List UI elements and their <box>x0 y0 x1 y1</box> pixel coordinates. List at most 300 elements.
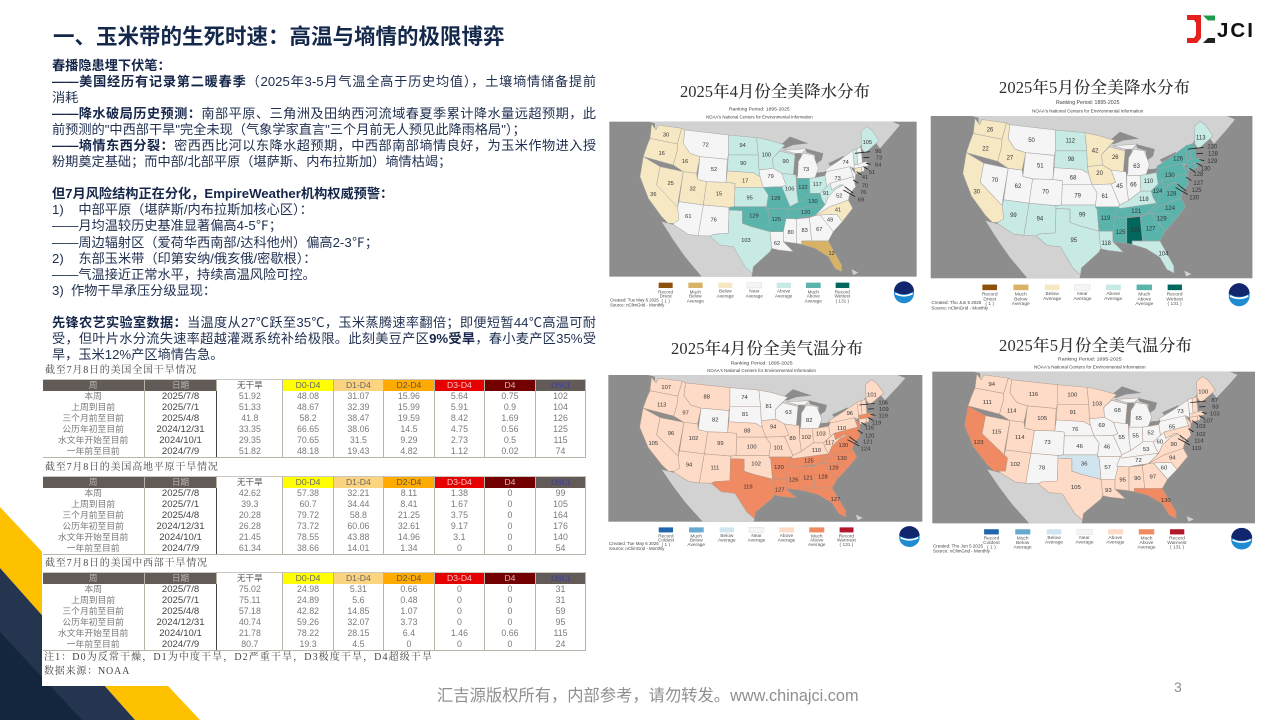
choropleth: May precipitation: 130 <box>1165 173 1175 179</box>
choropleth: May temperature: 53 <box>1143 447 1149 453</box>
table: national drought: 2024/7/9 <box>162 446 199 457</box>
choropleth: April precipitation: 17 <box>742 178 748 184</box>
table: national drought: 三个月前至目前 <box>62 413 124 423</box>
table: national drought: 48.18 <box>297 446 319 456</box>
choropleth: May temperature: Above <box>1140 540 1154 546</box>
table: midwest drought: 0.48 <box>400 595 417 605</box>
table: midwest drought: D0-D4 <box>296 573 320 583</box>
table: high plains drought: 2025/7/8 <box>162 488 199 499</box>
choropleth: May temperature: Average <box>1075 540 1094 545</box>
table: national drought: D4 <box>504 380 515 390</box>
choropleth: May temperature: 94 <box>988 382 996 388</box>
choropleth: April precipitation: 90 <box>783 159 789 165</box>
choropleth: April precipitation: 41 <box>835 207 841 213</box>
choropleth: April precipitation: Above <box>807 294 820 299</box>
choropleth: May precipitation: 45 <box>1116 184 1123 190</box>
table: national drought: 31.07 <box>347 391 369 401</box>
table: high plains drought: 3.75 <box>451 510 468 520</box>
table: high plains drought: 0 <box>508 543 512 553</box>
choropleth: May temperature: Average <box>1137 545 1156 550</box>
choropleth: April precipitation <box>609 106 917 308</box>
choropleth: May precipitation: 68 <box>1070 176 1077 182</box>
table: national drought: 4.82 <box>400 446 417 456</box>
text block: analysis: ——美国经历有记录第二暖春季（2025年3-5月气温全高于历史均值），土壤墒情储备提前 <box>52 74 596 89</box>
choropleth: April temperature: 125 <box>804 459 814 464</box>
text block: analysis <box>52 58 596 362</box>
choropleth: May temperature: 103 <box>1092 402 1102 408</box>
choropleth: May precipitation: Much <box>1015 292 1027 298</box>
choropleth: April temperature: 126 <box>789 478 798 483</box>
choropleth: April temperature: 102 <box>689 436 698 442</box>
choropleth: April temperature: 101 <box>867 392 877 398</box>
text block: analysis: 旱，玉米12%产区墒情告急。 <box>52 347 223 362</box>
table: national drought: 水文年开始至目前 <box>58 435 128 445</box>
choropleth: April precipitation: 41 <box>862 175 868 181</box>
text block: analysis: 粉期奠定基础；而中部/北部平原（堪萨斯、内布拉斯加）墒情枯竭； <box>52 154 451 169</box>
choropleth: May precipitation: 50 <box>1028 138 1036 144</box>
choropleth: April precipitation: Record <box>835 289 850 294</box>
choropleth: April precipitation: 52 <box>711 167 717 173</box>
table: midwest drought: 0 <box>457 595 462 605</box>
choropleth: May temperature: 94 <box>1169 456 1177 461</box>
table: midwest drought: 24.89 <box>297 595 319 605</box>
text block: analysis: ——周边辐射区（爱荷华西南部/达科他州）偏高2-3℉； <box>52 235 378 250</box>
choropleth: May precipitation: 26 <box>987 128 994 134</box>
choropleth: May temperature: Record <box>1169 536 1185 542</box>
table: national drought: 2025/7/8 <box>162 391 199 402</box>
choropleth: April precipitation: 122 <box>798 185 808 191</box>
table: national drought: 一年前至目前 <box>67 446 120 456</box>
table: midwest drought: 32.07 <box>347 617 369 627</box>
choropleth: April precipitation: 100 <box>762 152 771 158</box>
choropleth: April precipitation: 125 <box>772 217 781 223</box>
table: high plains drought: DSCI <box>551 477 570 487</box>
choropleth: April precipitation: 72 <box>703 142 709 148</box>
choropleth: April precipitation: Near <box>749 289 760 294</box>
table: high plains drought: 176 <box>553 521 568 531</box>
table: high plains drought: 0 <box>508 499 512 509</box>
table: midwest drought <box>43 572 586 651</box>
choropleth: May temperature: 52 <box>1147 431 1154 436</box>
choropleth: May precipitation: 63 <box>1133 164 1141 170</box>
choropleth: May temperature: Record <box>984 536 1000 542</box>
choropleth: May precipitation: 42 <box>1092 148 1098 154</box>
table: national drought: D0-D4 <box>296 380 320 390</box>
choropleth: April precipitation: 106 <box>785 186 794 192</box>
choropleth: April precipitation: Average <box>746 293 763 298</box>
text block: analysis: 春播隐患埋下伏笔： <box>52 58 171 73</box>
choropleth: April temperature: 100 <box>747 445 757 451</box>
table: national drought: 38.47 <box>347 413 369 423</box>
choropleth: April temperature: ( 1 ) <box>662 542 671 547</box>
table: high plains drought: 无干旱 <box>237 477 263 487</box>
choropleth: April temperature: 127 <box>831 497 840 503</box>
table: high plains drought: 42.62 <box>239 488 261 498</box>
choropleth: May temperature: 87 <box>1211 398 1218 404</box>
choropleth: April precipitation: Created: Tue May 6 2025 <box>610 297 659 302</box>
table: national drought: 125 <box>553 424 568 434</box>
choropleth: May precipitation: 126 <box>1173 156 1184 162</box>
choropleth: May precipitation: Average <box>1012 301 1030 307</box>
table: high plains drought: 58.8 <box>350 510 367 520</box>
table: midwest drought: 0 <box>508 606 512 616</box>
choropleth: April precipitation: 49 <box>827 217 833 223</box>
text block: analysis: ——气温接近正常水平，持续高温风险可控。 <box>52 267 316 282</box>
choropleth: April temperature: 97 <box>682 410 689 416</box>
table: national drought: 4.75 <box>451 424 468 434</box>
choropleth: April temperature: 107 <box>661 385 671 391</box>
text block: analysis: 消耗 <box>52 90 78 105</box>
choropleth: May precipitation: 124 <box>1153 189 1163 195</box>
choropleth: April precipitation: Wettest <box>834 294 851 299</box>
choropleth: May precipitation: 94 <box>1037 217 1044 223</box>
table: national drought: 0.9 <box>504 402 516 412</box>
choropleth: May precipitation: 20 <box>1096 171 1104 177</box>
table: national drought: 2025/7/1 <box>162 402 199 413</box>
note: data source: 数据来源：NOAA <box>44 666 130 677</box>
footer copyright: 汇吉源版权所有，内部参考，请勿转发。www.chinajci.com <box>437 687 859 705</box>
table: national drought: 29.35 <box>239 435 261 445</box>
choropleth: May temperature: ( 1 ) <box>987 545 996 550</box>
choropleth: April precipitation: 73 <box>834 176 841 182</box>
table: midwest drought: 78.22 <box>297 628 319 638</box>
table: national drought: 58.2 <box>299 413 317 423</box>
table: national drought: 19.43 <box>347 446 369 456</box>
choropleth: April precipitation: 120 <box>801 210 810 216</box>
table: high plains drought: 公历年初至目前 <box>62 521 124 531</box>
choropleth: April precipitation: 90 <box>740 161 746 167</box>
choropleth: May precipitation: 128 <box>1193 172 1204 178</box>
choropleth: May temperature: 100 <box>1067 393 1077 399</box>
table: high plains drought: 57.38 <box>297 488 319 498</box>
decorative corner stripes <box>0 507 200 720</box>
table: high plains drought: 54 <box>556 543 565 553</box>
choropleth: April precipitation: Below <box>719 289 732 294</box>
choropleth: May temperature: 115 <box>992 430 1001 435</box>
choropleth: April precipitation: 91 <box>823 191 829 197</box>
choropleth: April temperature: ( 131 ) <box>840 542 854 547</box>
choropleth: April temperature: Below <box>720 533 734 538</box>
choropleth: April temperature: 130 <box>837 456 847 462</box>
table: high plains drought: 79.72 <box>297 510 319 520</box>
table: midwest drought: 24 <box>556 639 565 649</box>
table: high plains drought: 105 <box>553 499 568 509</box>
table: midwest drought: 5.31 <box>350 584 367 594</box>
table: high plains drought: 2025/7/1 <box>162 499 199 510</box>
table: high plains drought: 78.55 <box>297 532 319 542</box>
table: high plains drought: 43.88 <box>347 532 369 542</box>
choropleth: April temperature: 113 <box>657 403 666 408</box>
choropleth: May temperature: 116 <box>1029 392 1038 398</box>
choropleth: April temperature: 130 <box>839 443 848 449</box>
table: national drought: 5.91 <box>451 402 468 412</box>
choropleth: April temperature: 111 <box>711 466 719 471</box>
choropleth: April temperature: 128 <box>818 474 828 480</box>
choropleth: May precipitation: Average <box>1073 296 1092 302</box>
choropleth: May precipitation: 95 <box>1070 238 1078 244</box>
text block: analysis: ——月均温较历史基准显著偏高4-5℉； <box>52 218 282 233</box>
choropleth: May temperature: Below <box>1016 540 1030 546</box>
table: high plains drought: 38.66 <box>297 543 319 553</box>
choropleth: April precipitation: 79 <box>768 174 774 180</box>
choropleth: April precipitation: 95 <box>747 195 753 201</box>
title: 一、玉米带的生死时速：高温与墒情的极限博弈 <box>53 25 505 49</box>
choropleth: May precipitation: ( 131 ) <box>1168 301 1182 307</box>
table: national drought: 33.35 <box>239 424 261 434</box>
choropleth: May temperature: Source: nClimGrid - Monthly <box>933 549 991 554</box>
table: national drought: 51.92 <box>239 391 261 401</box>
table: national drought: 1.69 <box>501 413 519 423</box>
choropleth: April precipitation: 76 <box>711 217 717 223</box>
choropleth: April temperature: Average <box>748 537 766 542</box>
table: national drought: 9.29 <box>400 435 417 445</box>
table: high plains drought: 21.25 <box>398 510 420 520</box>
choropleth: May precipitation: 61 <box>1102 194 1108 200</box>
table: high plains drought: 26.28 <box>239 521 261 531</box>
table: national drought: 8.42 <box>451 413 468 423</box>
choropleth: May precipitation: 62 <box>1015 184 1021 190</box>
choropleth: April precipitation: 129 <box>749 213 759 219</box>
choropleth: May precipitation: Much <box>1138 292 1151 298</box>
choropleth: May precipitation: Below <box>1014 296 1028 302</box>
choropleth: May temperature: Much <box>1017 536 1029 542</box>
choropleth: May temperature: 111 <box>983 400 992 406</box>
choropleth: April temperature: 119 <box>872 421 881 426</box>
table: midwest drought: 0 <box>457 606 462 616</box>
choropleth: May precipitation: Record <box>982 292 998 298</box>
choropleth: May temperature: 130 <box>1161 498 1171 504</box>
choropleth: May temperature: 105 <box>1037 416 1047 422</box>
choropleth: April temperature: Coldest <box>658 538 675 543</box>
table: high plains drought: 上周到目前 <box>71 499 115 509</box>
table: national drought: 公历年初至目前 <box>62 424 124 434</box>
choropleth: May precipitation: 22 <box>982 147 989 153</box>
table: national drought: 48.67 <box>297 402 319 412</box>
choropleth: May precipitation: Wettest <box>1166 296 1183 302</box>
choropleth: April temperature: Average <box>687 542 705 547</box>
table: midwest drought: 0 <box>406 639 411 649</box>
choropleth: May precipitation: 110 <box>1144 179 1154 185</box>
choropleth: April temperature: 119 <box>743 485 753 491</box>
table: national drought: 15.96 <box>398 391 420 401</box>
table: high plains drought: D3-D4 <box>447 477 472 487</box>
choropleth: April temperature: Above <box>810 538 824 543</box>
choropleth: May temperature: 78 <box>1039 465 1045 471</box>
choropleth: May precipitation: 99 <box>1010 213 1017 219</box>
table: national drought: 1.12 <box>451 446 468 456</box>
table: midwest drought: 0.66 <box>501 628 519 638</box>
choropleth: April temperature: NOAA's National Centers for Environmental Information <box>707 368 817 373</box>
choropleth: April precipitation: 51 <box>869 170 875 176</box>
table: national drought: 41.8 <box>241 413 258 423</box>
choropleth: April temperature: 121 <box>863 440 873 446</box>
choropleth: April temperature: 99 <box>717 441 724 447</box>
table: midwest drought: D3-D4 <box>447 573 472 583</box>
table: midwest drought: 0 <box>508 595 512 605</box>
table: national drought: 19.59 <box>398 413 420 423</box>
choropleth: April temperature: 106 <box>878 401 888 406</box>
choropleth: May precipitation: Average <box>1043 296 1061 302</box>
choropleth: May temperature: 76 <box>1072 427 1078 433</box>
choropleth: April precipitation: 36 <box>650 192 656 198</box>
table: high plains drought: 0 <box>457 543 462 553</box>
table: high plains drought: 一年前至目前 <box>67 543 120 553</box>
choropleth: May precipitation: Above <box>1137 296 1151 302</box>
choropleth: May precipitation: 125 <box>1116 230 1126 236</box>
choropleth: May temperature: Average <box>1045 540 1064 545</box>
table: high plains drought: D1-D4 <box>346 477 371 487</box>
table: high plains drought: 1.34 <box>400 543 417 553</box>
table: national drought: 115 <box>553 435 568 445</box>
choropleth: May precipitation: 104 <box>1159 251 1169 257</box>
page number: 3 <box>1174 679 1182 695</box>
choropleth: April temperature: 105 <box>648 441 658 447</box>
choropleth: May temperature: 103 <box>1210 412 1220 417</box>
choropleth: May precipitation: 113 <box>1196 136 1206 142</box>
choropleth: April precipitation: 52 <box>836 193 842 199</box>
table: high plains drought: 2025/4/8 <box>162 510 199 521</box>
table: midwest drought: DSCI <box>551 573 570 583</box>
text block: analysis: ——墒情东西分裂：密西西比河以东降水超预期，中西部南部墒情良好，为玉米作物进入授 <box>52 138 596 153</box>
table: high plains drought: 8.11 <box>401 488 417 498</box>
table: midwest drought: 5.6 <box>352 595 364 605</box>
choropleth: May precipitation: 70 <box>1042 189 1050 195</box>
caption: high plains drought table: 截至7月8日的美国高地平原干旱情况 <box>45 462 219 473</box>
table: midwest drought: 上周到目前 <box>71 595 115 605</box>
choropleth: May temperature: 69 <box>1098 423 1105 429</box>
choropleth: April temperature: 109 <box>879 407 889 413</box>
choropleth: May temperature: 107 <box>1203 419 1213 425</box>
table: midwest drought: 三个月前至目前 <box>62 606 124 616</box>
choropleth: May precipitation: Created: Thu Jun 5 2025 <box>931 300 982 305</box>
choropleth: May temperature: 36 <box>1081 462 1088 467</box>
choropleth: May precipitation: 98 <box>1068 157 1075 163</box>
choropleth: May temperature: 73 <box>1177 409 1184 415</box>
choropleth: May temperature: 55 <box>1132 434 1139 440</box>
table: midwest drought: 80.7 <box>241 639 258 649</box>
choropleth: April precipitation: 16 <box>659 151 665 157</box>
choropleth: May temperature: 114 <box>1194 439 1205 445</box>
choropleth: May temperature: 68 <box>1114 408 1121 414</box>
map title: May precipitation: 2025年5月份全美降水分布 <box>999 77 1190 97</box>
text block: analysis: 3) 作物干旱承压分级显现： <box>52 283 216 298</box>
table: midwest drought: 0 <box>457 584 462 594</box>
choropleth: May temperature: Average <box>1014 545 1032 550</box>
table: high plains drought: 14.96 <box>398 532 420 542</box>
table: high plains drought: 9.17 <box>451 521 468 531</box>
choropleth: April temperature: Much <box>811 534 823 538</box>
table: midwest drought: 无干旱 <box>237 573 263 583</box>
choropleth: May precipitation: 30 <box>973 190 981 196</box>
choropleth: May temperature: Created: Thu Jun 5 2025 <box>933 544 984 548</box>
choropleth: May precipitation: 119 <box>1101 216 1111 222</box>
table: midwest drought: 本周 <box>84 584 102 594</box>
text block: analysis: 2) 东部玉米带（印第安纳/俄亥俄/密歇根）： <box>52 251 316 266</box>
choropleth: May temperature: Ranking Period: 1895-2025 <box>1058 357 1122 362</box>
choropleth: April precipitation: 103 <box>741 238 751 244</box>
table: high plains drought: 0 <box>508 510 512 520</box>
choropleth: May precipitation: 129 <box>1207 159 1218 165</box>
table: midwest drought: 2024/12/31 <box>157 617 205 628</box>
table: national drought: 0.02 <box>501 446 519 456</box>
choropleth: May precipitation: 26 <box>1112 155 1119 161</box>
choropleth: April precipitation: 61 <box>685 214 691 220</box>
choropleth: May precipitation: 118 <box>1139 197 1149 203</box>
choropleth: May precipitation: Near <box>1077 291 1088 297</box>
table: midwest drought: 24.98 <box>297 584 319 594</box>
table: national drought: 2025/4/8 <box>162 413 199 424</box>
choropleth: May precipitation: 118 <box>1102 241 1112 247</box>
table: midwest drought: 周 <box>89 573 97 583</box>
choropleth: May temperature: Below <box>1047 535 1061 541</box>
choropleth: May precipitation: 124 <box>1165 206 1176 212</box>
choropleth: May temperature: Near <box>1079 535 1090 541</box>
choropleth: April temperature: 120 <box>865 433 874 439</box>
table: high plains drought: 2024/7/9 <box>162 543 199 554</box>
table: high plains drought: 周 <box>89 477 97 487</box>
map title: April temperature: 2025年4月份全美气温分布 <box>671 338 863 358</box>
choropleth: May temperature: 93 <box>1105 488 1112 494</box>
choropleth: May temperature: 73 <box>1044 440 1051 446</box>
choropleth: April temperature: 89 <box>789 436 796 442</box>
choropleth: May precipitation: 127 <box>1146 226 1155 232</box>
choropleth: April precipitation: 80 <box>787 230 794 236</box>
table: midwest drought: 40.74 <box>239 617 261 627</box>
choropleth: April precipitation: Driest <box>660 294 672 299</box>
table: midwest drought: 0 <box>508 639 512 649</box>
table: national drought: 周 <box>89 380 97 390</box>
choropleth: April precipitation: Average <box>775 293 793 298</box>
text block: analysis: 先锋农艺实验室数据：当温度从27℃跃至35℃，玉米蒸腾速率翻倍；即便短暂44℃高温可耐 <box>52 315 596 330</box>
table: national drought: 上周到目前 <box>71 402 115 412</box>
table: national drought: 日期 <box>172 380 189 390</box>
choropleth: April precipitation: Average <box>687 298 704 303</box>
table: national drought: 0.75 <box>501 391 519 401</box>
choropleth: April temperature: 119 <box>879 414 888 419</box>
table: midwest drought: 57.18 <box>239 606 261 616</box>
table: high plains drought: 三个月前至目前 <box>62 510 124 520</box>
table: midwest drought: 2024/10/1 <box>159 628 202 639</box>
choropleth: April temperature: Ranking Period: 1895-2025 <box>731 360 793 366</box>
table: high plains drought: 3.1 <box>453 532 466 542</box>
table: national drought: 66.65 <box>297 424 319 434</box>
table: high plains drought: 32.21 <box>347 488 369 498</box>
choropleth: April temperature: 94 <box>770 425 776 430</box>
choropleth: April precipitation: ( 131 ) <box>836 298 849 303</box>
choropleth: May precipitation: Below <box>1046 291 1059 297</box>
table: national drought: D3-D4 <box>447 380 472 390</box>
table: midwest drought: 28.15 <box>347 628 369 638</box>
choropleth: April precipitation: NOAA's National Centers for Environmental Information <box>706 114 813 119</box>
choropleth: April precipitation: 73 <box>876 155 882 161</box>
caption: national drought table: 截至7月8日的美国全国干旱情况 <box>45 365 197 376</box>
choropleth: May precipitation: 128 <box>1167 191 1177 197</box>
table: national drought <box>43 379 586 458</box>
choropleth: May temperature: 91 <box>1070 410 1076 416</box>
table: national drought: 102 <box>553 391 568 401</box>
choropleth: April temperature <box>608 360 922 551</box>
choropleth: May precipitation: Average <box>1104 296 1123 302</box>
choropleth: April temperature: 124 <box>861 447 870 452</box>
choropleth: May temperature: 46 <box>1104 445 1110 450</box>
choropleth: April precipitation: 128 <box>771 196 780 202</box>
table: national drought: 14.5 <box>400 424 417 434</box>
choropleth: April temperature: Near <box>751 533 762 538</box>
table: national drought: 104 <box>553 402 568 412</box>
choropleth: May precipitation: 27 <box>1007 155 1013 161</box>
table: high plains drought: 164 <box>553 510 568 520</box>
text block: analysis: ——降水破局历史预测：南部平原、三角洲及田纳西河流域春夏季累计降水量远超预期，此 <box>52 106 596 121</box>
